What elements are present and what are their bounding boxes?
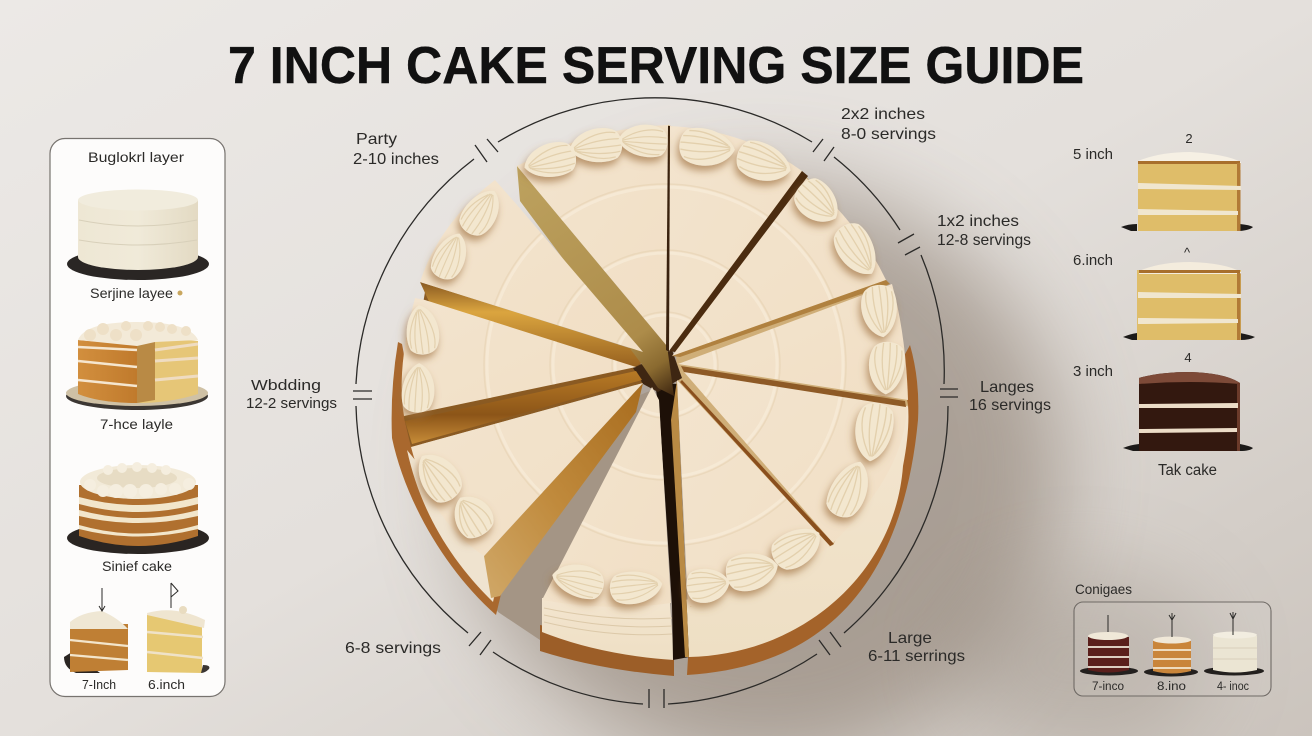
left slice backing (404, 292, 643, 447)
label: 1x2 inches: 1x2 inches (937, 213, 1019, 230)
caption: 7-inch: 7-Inch (82, 677, 116, 692)
label: 5 inch: 5 inch (1073, 147, 1113, 163)
mini cake: red velvet (1080, 615, 1138, 676)
slice: chocolate (1123, 372, 1253, 451)
label: wedding: Wbdding (251, 377, 321, 394)
heading: panel label: Buglokrl layer (88, 150, 185, 165)
caption: 6-inch: 6.inch (148, 677, 185, 692)
guide ring around cake (353, 98, 958, 708)
slice: upper left (420, 180, 643, 352)
thin cuts between slices (666, 126, 906, 546)
slice: top centre (669, 126, 802, 351)
slice: bottom left (411, 383, 643, 556)
label: wedding: 12-2 servings (246, 395, 337, 412)
spatula rings on frosting (484, 184, 846, 546)
label: larger: Langes (980, 379, 1034, 396)
slice: small yellow with flag (147, 583, 209, 673)
label: mini cakes heading: Conigaes (1075, 581, 1132, 597)
slice: vanilla 6 inch (1123, 262, 1255, 340)
label: 6 inch: 6.inch (1073, 253, 1113, 269)
title: 7 INCH CAKE SERVING SIZE GUIDE (228, 37, 1084, 95)
slice: bottom (542, 387, 671, 607)
golden cut strips (405, 282, 643, 444)
slice: bottom right (677, 380, 830, 607)
slice: upper right (672, 178, 886, 356)
caption: mini 3: 4- inoc (1217, 681, 1249, 693)
cake centre (633, 350, 682, 392)
slice: lower right (684, 372, 907, 543)
cake: naked layered (67, 462, 209, 554)
label: number 4: 4 (1184, 350, 1192, 365)
crumb strip of top slice (517, 166, 674, 396)
panel: cake types (50, 138, 225, 696)
label: caret: ^ (1184, 245, 1191, 260)
slice: right (678, 284, 908, 400)
label: large: 6-11 serrings (868, 648, 965, 665)
frosted slice tops (402, 125, 908, 607)
caption: first cake: Serjine layee (90, 285, 173, 301)
label: 6-8 servings: 6-8 servings (345, 640, 441, 657)
slice: vanilla 5 inch (1121, 152, 1253, 231)
mini cake: orange (1144, 613, 1198, 676)
label: 3 inch: 3 inch (1073, 364, 1113, 380)
main cake, cut into slices (392, 122, 918, 676)
caption: second cake: 7-hce layle (100, 416, 173, 432)
panel: mini cakes (1074, 602, 1271, 696)
ground gap shadow (491, 390, 652, 640)
label: party: Party (356, 131, 397, 148)
label: 2x2 inches: 2x2 inches (841, 106, 925, 123)
label: party: 2-10 inches (353, 151, 439, 168)
caption: mini 1: 7-inco (1092, 681, 1124, 693)
label: number 2: 2 (1185, 131, 1193, 146)
cake: cut layered (66, 321, 208, 410)
label: 1x2 inches: 12-8 servings (937, 232, 1031, 249)
slice: left (402, 298, 636, 416)
label: large: Large (888, 630, 932, 647)
piped frosting border (400, 122, 906, 606)
dark gap between slices (655, 382, 689, 660)
mini cake: white (1204, 612, 1264, 676)
cut side of front-left slice (484, 383, 643, 598)
cake: plain frosted (67, 190, 209, 280)
slice: small orange with arrow (64, 588, 128, 673)
lower right shading (950, 570, 1210, 736)
slice: top left (517, 125, 668, 346)
caption: mini 2: 8.ino (1157, 681, 1186, 693)
slice comparison column (1073, 131, 1255, 479)
label: larger: 16 servings (969, 397, 1051, 414)
cake cast shadow (460, 180, 1060, 736)
label: 2x2 inches: 8-0 servings (841, 126, 936, 143)
crumb base (392, 342, 918, 676)
frosted outer walls (407, 405, 908, 660)
caption: chocolate: Tak cake (1158, 462, 1217, 479)
caption: third cake: Sinief cake (102, 558, 172, 574)
slice backing under cuts (668, 125, 908, 607)
